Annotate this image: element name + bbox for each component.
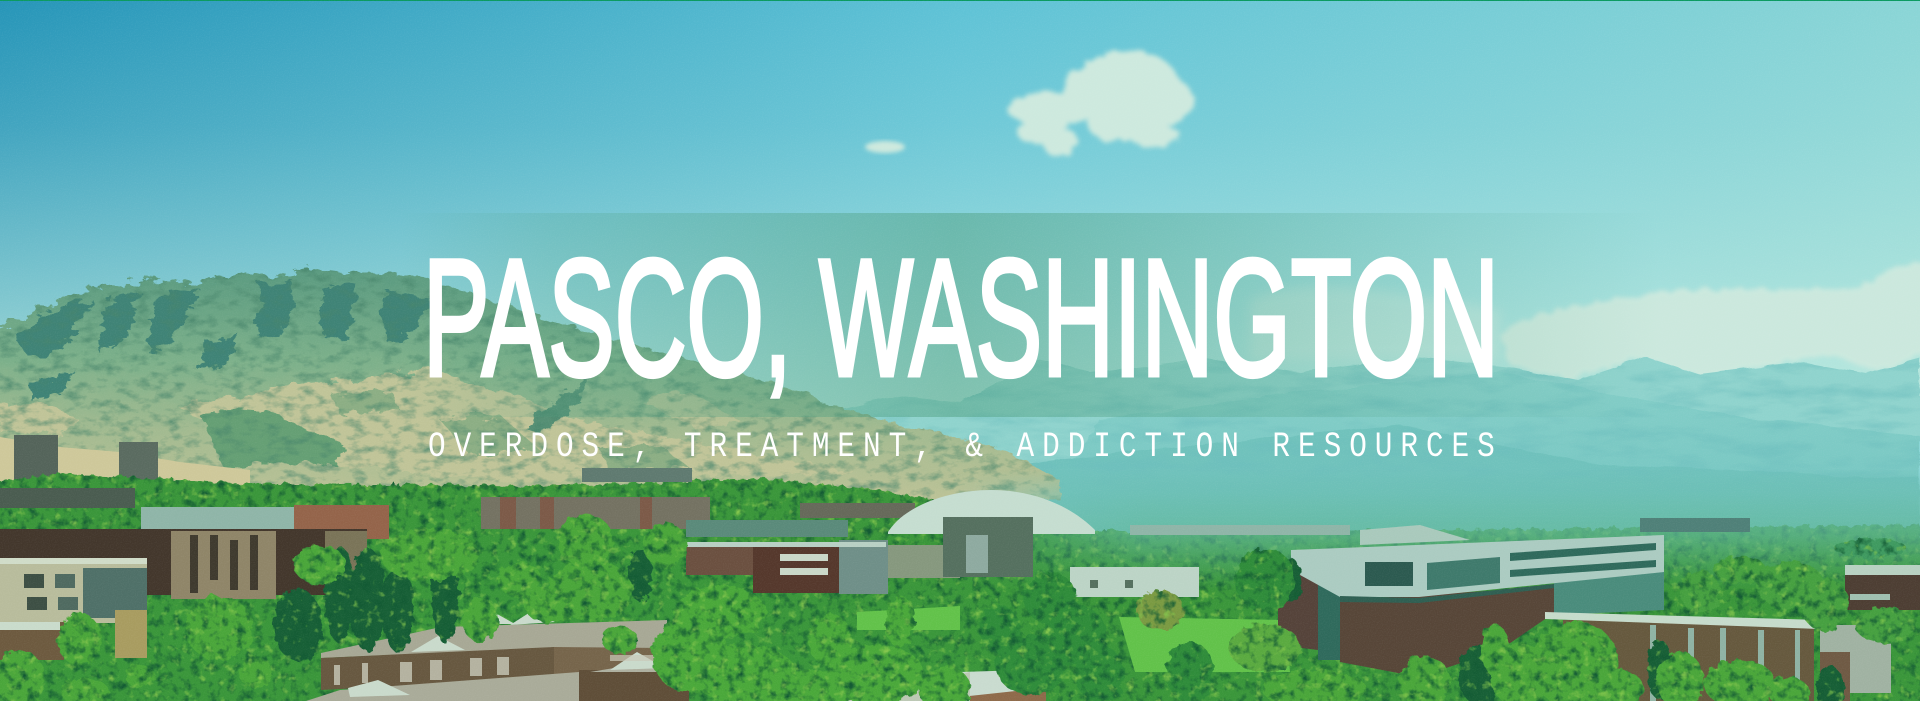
center low building [306,610,692,701]
tan foothill [0,437,250,490]
dome-side trees [980,548,1301,701]
icon: main cloud [1007,50,1193,157]
white low building [1070,567,1199,597]
distant campus buildings [0,468,1750,537]
lawns [857,606,1290,672]
distant mountains [830,357,1920,570]
middle campus buildings [686,517,1199,597]
band behind title [400,213,1660,417]
low brown annex [0,622,64,660]
dark upper gullies [14,282,432,400]
clouds [865,50,1920,380]
top green rule [0,0,1920,1]
green knoll [202,410,343,470]
tan lower slopes [0,368,857,482]
long brown building [1545,565,1920,701]
subtitle: OVERDOSE, TREATMENT, & ADDICTION RESOURCES [428,427,1495,467]
dark brown hall [0,529,367,595]
back tree line and ground [0,474,1920,701]
bright left trees [0,514,687,701]
foreground trees [0,514,1915,701]
dark conifers [274,547,1844,701]
icon: faint cloud behind band [1250,287,1500,360]
center trees [652,586,971,701]
sky [0,0,1920,520]
valley haze [978,476,1920,582]
striped tan hall [171,531,276,599]
brick building [294,505,389,539]
icon: small cloud [865,141,905,153]
foreground mountain [0,268,1060,500]
right edge trees [1680,538,1915,643]
roof pyramids [348,610,665,697]
diagonal gully [525,377,590,435]
large modern building [1278,525,1664,677]
beige front building [0,558,147,623]
icon: right cloud bank [1500,262,1920,380]
lower-right trees [1263,621,1810,701]
towers [14,435,158,484]
glass building [141,507,294,529]
left campus buildings [0,505,389,660]
mid-slope green patches [330,390,690,472]
dome [888,490,1095,534]
bottom-center building [790,670,1046,701]
